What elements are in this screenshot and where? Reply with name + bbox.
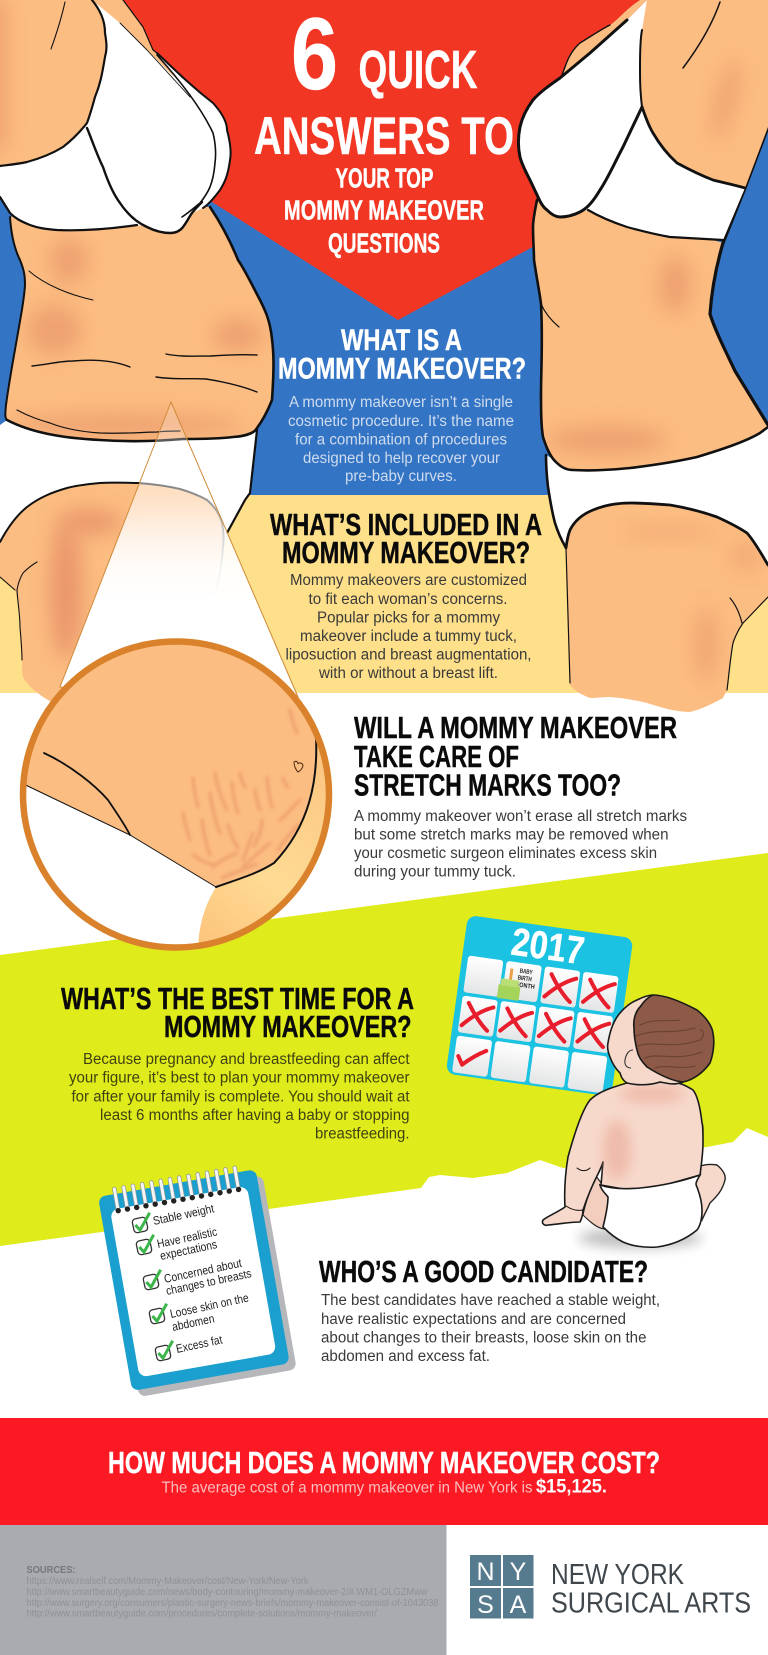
calendar cells [452,955,619,1093]
logo letters: A [510,1591,527,1619]
logo squares [470,1555,534,1618]
title: QUICK [358,40,478,100]
body text: Because pregnancy and breastfeeding can affect [83,1051,410,1068]
title: YOUR TOP [336,162,434,194]
red crosses [461,963,615,1047]
left shoulder sliver [92,0,190,95]
title: ANSWERS TO [254,107,514,166]
red title banner [100,0,660,320]
body text: have realistic expectations and are concerned [321,1311,626,1328]
baby right leg [690,1164,725,1220]
belly button [294,761,303,772]
body text: for a combination of procedures [295,432,507,448]
illustration: right thigh [566,503,768,712]
panel: yellow section background [0,495,768,693]
baby head [608,995,690,1085]
calendar year: 2017 [509,921,587,973]
stretch marks [183,710,300,878]
heading: WHAT’S THE BEST TIME FOR A [61,981,414,1016]
heading: MOMMY MAKEOVER? [164,1009,412,1044]
heading: WILL A MOMMY MAKEOVER [354,710,677,745]
cost text: The average cost of a mommy makeover in New York is [162,1480,532,1496]
title [254,0,514,258]
baby birth month cell: MONTH [514,981,535,991]
heading: TAKE CARE OF [354,739,519,774]
baby birth month cell [497,965,537,1003]
body text: during your tummy tuck. [354,864,516,880]
panel: cost banner [0,1418,768,1525]
baby ear [625,1050,633,1068]
heading: MOMMY MAKEOVER? [282,535,530,570]
checklist labels: Concerned about [163,1256,243,1286]
section: best time [61,981,414,1142]
checklist labels: Excess fat [175,1332,224,1356]
body text [286,572,532,682]
title: QUESTIONS [328,228,440,258]
white underwear [26,786,216,950]
illustration: left thigh [0,483,224,703]
logo: New York Surgical Arts [470,1555,751,1620]
panel: lime section background [0,853,768,1246]
lighter thigh area [200,747,326,940]
baby hair waves [636,1020,703,1068]
belly outline and creases [26,737,316,887]
right bra outline [518,2,745,240]
body text: with or without a breast lift. [318,665,498,682]
left torso outline and creases [5,207,274,441]
body text: about changes to their breasts, loose skin on the [321,1330,646,1346]
baby left leg [583,1176,610,1229]
right torso skin [533,200,768,470]
notebook page [110,1186,276,1377]
cost figure: $15,125. [536,1476,607,1498]
section: stretch marks [354,710,687,880]
sources heading: SOURCES: [26,1564,76,1576]
notebook back sheet [105,1175,297,1397]
source links [26,1575,439,1620]
illustration: right torso [518,0,768,570]
left bra [0,0,231,233]
body text: least 6 months after having a baby or stopping [100,1107,410,1124]
section: who's a good candidate [319,1254,660,1365]
magnifier beam [60,402,298,697]
heading [278,324,526,386]
checklist labels: Stable weight [152,1201,216,1228]
source links: https://www.realself.com/Mommy-Makeover/cost/New-York/New-York [26,1575,309,1587]
body text [288,394,514,485]
logo letters: S [477,1591,494,1619]
panel: sources [0,1525,446,1655]
body text: your cosmetic surgeon eliminates excess skin [354,845,657,862]
checklist labels: changes to breasts [165,1266,253,1298]
red check mark [457,1047,486,1068]
heading: WHAT IS A [341,324,462,357]
diaper [600,1175,702,1247]
baby hair [634,995,714,1082]
notebook rings [114,1168,239,1211]
body text: for after your family is complete. You should wait at [72,1088,410,1106]
body text: breastfeeding. [315,1126,410,1142]
notebook cover [98,1169,290,1391]
logo wordmark: NEW YORK [551,1559,684,1591]
check boxes [131,1213,176,1361]
left bra outline [0,0,231,233]
heading [270,507,542,570]
heading [61,981,414,1044]
section: what's included [270,507,542,682]
body text: A mommy makeover isn’t a single [289,394,513,411]
right torso outline [533,127,768,548]
baby arm crease [566,1168,590,1210]
checklist labels: abdomen [171,1311,216,1334]
baby back and arm [542,1082,703,1225]
heading: WHO’S A GOOD CANDIDATE? [319,1254,648,1289]
right shoulder sliver [562,0,647,75]
body text [69,1051,410,1142]
body text: A mommy makeover won’t erase all stretch marks [354,808,687,825]
heading [354,710,677,802]
body text [321,1292,660,1365]
body text: pre-baby curves. [345,468,457,485]
source links: http://www.surgery.org/consumers/plastic-surgery-news-briefs/mommy-makeover-consist-of-1043038 [26,1597,439,1609]
logo letters: Y [510,1558,527,1586]
panel: blue section background [0,0,768,496]
checklist labels: Have realistic [156,1225,218,1251]
checklist labels: Loose skin on the [169,1291,250,1321]
source links: http://www.smartbeautyguide.com/procedures/complete-solutions/mommy-makeover/ [26,1608,377,1620]
heading: MOMMY MAKEOVER? [278,352,526,386]
body text [354,808,687,880]
checklist labels: expectations [159,1237,218,1263]
source links: http://www.smartbeautyguide.com/news/body-contouring/mommy-makeover-2/#.WM1-OLGZMww [26,1586,428,1598]
illustration: baby [542,995,725,1248]
left arm skin [0,0,106,166]
right bra [518,0,745,240]
logo wordmark [551,1559,751,1620]
body text: liposuction and breast augmentation, [286,646,532,664]
left underwear [0,420,257,560]
body text: abdomen and excess fat. [321,1348,490,1365]
body text: your figure, it’s best to plan your mommy makeover [69,1070,410,1086]
right underwear [546,427,768,570]
section: what is a mommy makeover [278,324,526,485]
body text: Popular picks for a mommy [317,610,500,626]
body text: but some stretch marks may be removed when [354,826,668,844]
body text: makeover include a tummy tuck, [300,628,517,645]
logo letters [476,1558,527,1619]
title: 6 [291,0,338,111]
icon: 2017 calendar [446,914,634,1097]
body text: The best candidates have reached a stable weight, [321,1292,660,1309]
heading: WHAT’S INCLUDED IN A [270,507,542,542]
left torso skin [5,205,274,441]
baby birth month cell: BIRTH [517,975,532,983]
logo letters: N [476,1558,495,1586]
right arm skin [640,0,768,188]
baby birth month cell: BABY [519,968,533,977]
heading: STRETCH MARKS TOO? [354,768,621,802]
title: MOMMY MAKEOVER [284,194,484,226]
icon: notebook checklist [98,1168,297,1397]
illustration: left torso [0,0,274,560]
body text: cosmetic procedure. It’s the name [288,413,514,430]
body text: designed to help recover your [303,450,500,467]
body text: Mommy makeovers are customized [290,572,527,589]
magnified circle: stretch marks [20,638,332,951]
body text: to fit each woman’s concerns. [308,591,508,608]
baby shadow [578,1228,702,1248]
checklist labels [152,1201,253,1356]
